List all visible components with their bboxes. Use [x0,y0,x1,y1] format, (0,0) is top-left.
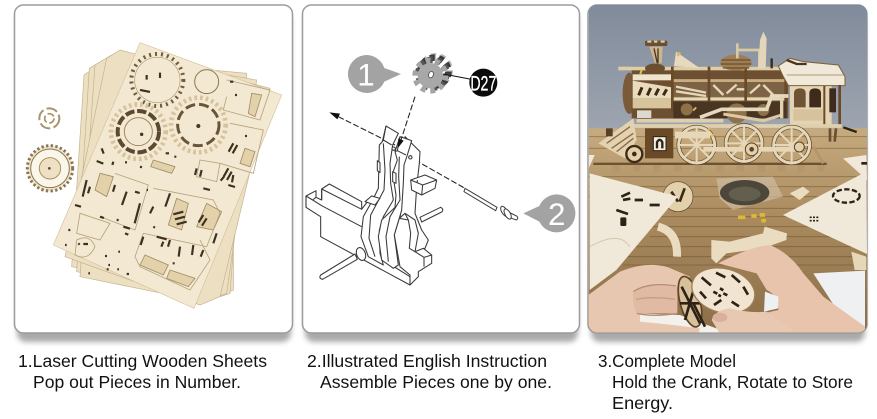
back wheel [677,276,703,328]
cowcatcher [598,118,637,158]
caption: step 2: 2.Illustrated English Instruction [307,351,547,371]
loose gear parts [27,108,73,191]
right hand back [718,245,865,334]
caption: step 3: Energy. [612,393,673,413]
thumb [712,308,768,332]
arrow: shaft path dashed [329,112,465,188]
illustration: stack of wooden sheets [27,43,282,308]
slot holes [65,73,247,274]
sand dome and valve [674,52,700,68]
front wheel [691,268,756,312]
front end block [394,213,432,285]
badge: step 2: 2 [548,197,565,232]
rear lever [361,126,398,265]
caption: step 3: Hold the Crank, Rotate to Store [612,372,853,392]
caption: step 3: 3.Complete Model [598,351,736,371]
panel: instruction diagram [302,5,580,342]
boiler and frame [623,73,636,114]
loose wooden sheets [589,155,867,290]
exploded assembly drawing [306,126,443,285]
wall background [589,5,867,130]
valve box [645,128,673,158]
caption: step 2 [307,351,552,392]
label: D27 [443,69,497,97]
front sheet [53,43,282,308]
badge: step 2 [523,194,575,232]
connecting rods [675,132,710,138]
locomotive [593,32,857,168]
label: D27: D27 [470,71,496,95]
caption: step 3 [598,351,853,413]
track [593,163,827,165]
white paper [813,271,865,333]
arrow: gear path dashed [398,97,415,148]
running board and pipes [637,110,652,118]
cab [790,83,832,125]
wheels [626,125,810,163]
left hand [588,265,700,334]
hands holding wheel [588,245,865,334]
caption: step 1: Pop out Pieces in Number. [33,372,241,392]
caption: step 1: 1.Laser Cutting Wooden Sheets [18,351,267,371]
shaft part [464,188,518,220]
wooden table [589,128,867,332]
panel: completed model photo [588,5,867,342]
badge: step 1 [348,55,401,93]
gear outlines [111,54,226,159]
chimney [649,47,663,63]
outline cuts [75,80,270,290]
cut-out shaded panels [95,93,262,287]
stacked back sheets [65,50,270,305]
badge: step 1: 1 [357,57,375,92]
front lever [378,137,412,268]
panel: laser cut sheets [14,5,292,342]
caption: step 2: Assemble Pieces one by one. [320,372,552,392]
yellow bolts [640,53,713,136]
caption: step 1 [18,351,267,392]
icon: gear D27 [416,56,450,90]
parts bag and small parts [716,177,783,221]
